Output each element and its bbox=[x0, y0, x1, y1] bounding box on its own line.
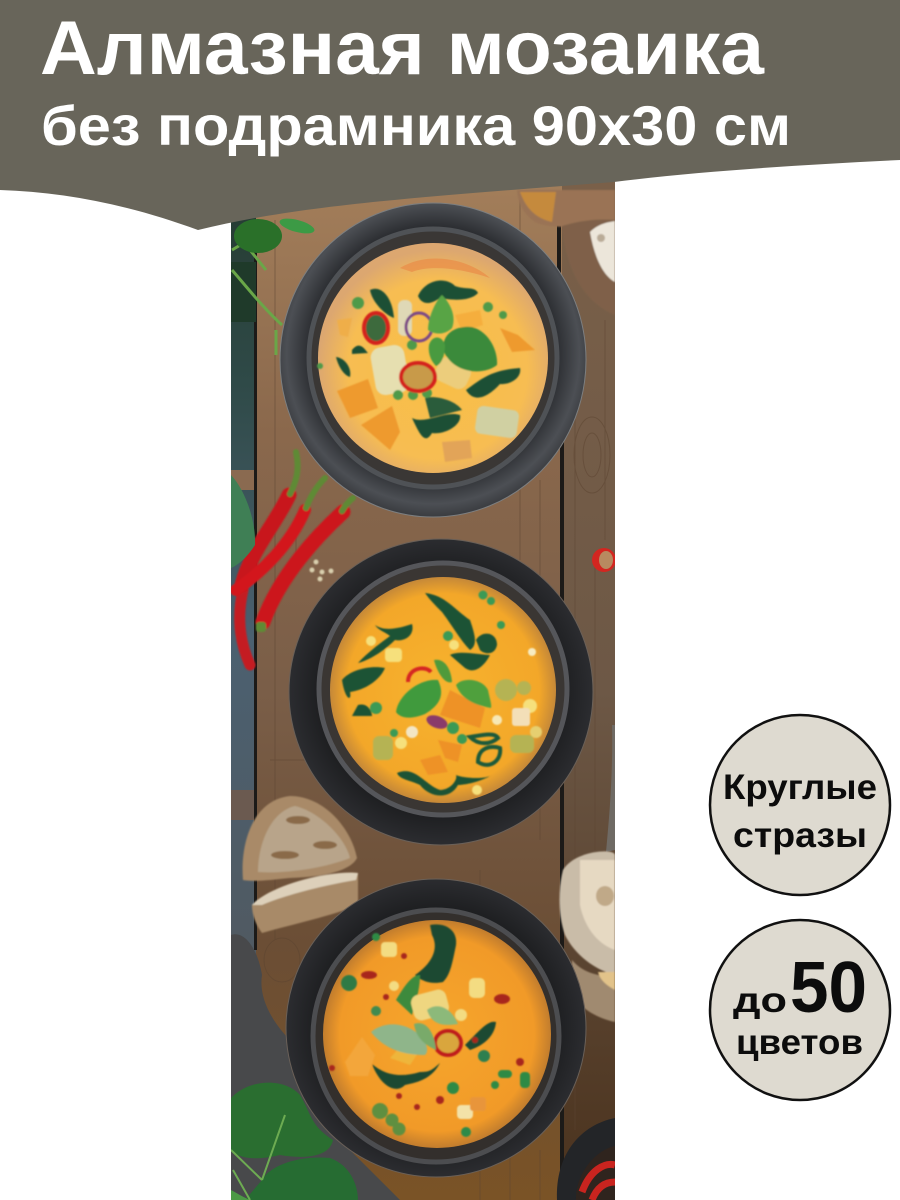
peas bbox=[317, 297, 507, 400]
plate and bowl 2 bbox=[289, 539, 593, 845]
chili ring right bbox=[592, 548, 616, 572]
bowl 1 bbox=[309, 229, 557, 487]
peas bbox=[370, 590, 505, 744]
spinach leaf left bbox=[231, 475, 255, 568]
basil leaves bbox=[371, 1024, 427, 1055]
badge: round rhinestones: стразы bbox=[733, 816, 867, 855]
squash cubes bbox=[337, 310, 535, 462]
spinach bbox=[336, 281, 520, 438]
badge: up to 50 colours: цветов bbox=[736, 1023, 863, 1062]
title: Алмазная мозаика bbox=[40, 6, 765, 91]
wood planks bbox=[231, 180, 615, 1200]
plate 1 bbox=[280, 203, 586, 517]
bread top right bbox=[517, 190, 615, 315]
onion bbox=[406, 313, 432, 341]
peas bbox=[341, 933, 530, 1137]
spinach leaves bottom left bbox=[231, 1083, 358, 1200]
bread slices right bbox=[559, 851, 615, 1022]
chili ring bbox=[435, 1031, 461, 1055]
squash bbox=[420, 690, 485, 775]
herb sprig top left bbox=[231, 216, 316, 355]
plate and bowl 3 bbox=[286, 879, 586, 1177]
badge: up to 50 colours: до bbox=[733, 981, 787, 1020]
photo: soup bowls on wooden table bbox=[231, 180, 616, 1200]
chili ring bbox=[408, 668, 431, 682]
header banner bbox=[0, 0, 900, 230]
soup 1 bbox=[317, 243, 548, 473]
plate 2 bbox=[289, 539, 593, 845]
chili peppers bbox=[236, 452, 353, 665]
red chili flakes bbox=[329, 953, 524, 1110]
soup 2 bbox=[330, 577, 556, 803]
badge: round rhinestones bbox=[710, 715, 890, 895]
fork bbox=[606, 725, 615, 852]
spinach bbox=[342, 593, 497, 716]
badge: up to 50 colours bbox=[710, 920, 890, 1100]
grey cloth bbox=[231, 934, 400, 1200]
plate 3 bbox=[286, 879, 586, 1177]
corn bbox=[369, 300, 520, 439]
bread rolls left bbox=[243, 796, 358, 933]
badge: round rhinestones: Круглые bbox=[723, 768, 877, 807]
squash bbox=[345, 1037, 375, 1076]
chili rings bbox=[364, 313, 388, 343]
badge: up to 50 colours: 50 bbox=[790, 948, 867, 1028]
small bowl bottom right bbox=[557, 1118, 615, 1200]
bowl 2 bbox=[319, 563, 567, 815]
bowl 3 bbox=[313, 910, 559, 1162]
soup 3 bbox=[323, 920, 551, 1148]
basil leaves bbox=[443, 327, 497, 371]
plate and bowl 1 bbox=[280, 203, 586, 517]
basil leaves bbox=[396, 680, 441, 718]
subtitle: без подрамника 90х30 см bbox=[41, 94, 791, 157]
corn bbox=[381, 942, 486, 1119]
corn and vegetables bbox=[366, 636, 542, 795]
spinach bbox=[372, 924, 496, 1089]
onion bbox=[426, 714, 448, 730]
